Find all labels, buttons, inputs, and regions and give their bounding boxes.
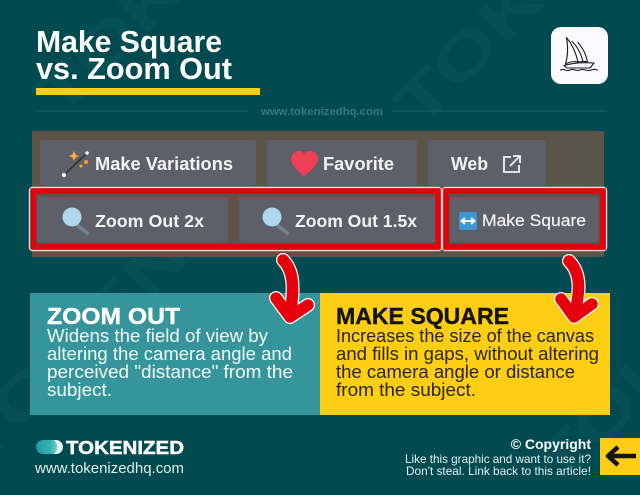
title underline [36, 88, 260, 95]
panel: discord buttons [32, 131, 604, 257]
description: subject. [47, 380, 112, 400]
title [36, 24, 232, 86]
arrow: to zoom out [276, 260, 308, 317]
footer logo: TOKENIZED [66, 437, 184, 458]
copyright note: © Copyright [511, 436, 591, 452]
copyright note: Don't steal. Link back to this article! [406, 464, 591, 478]
button: web: Web [451, 153, 488, 174]
button: make variations: Make Variations [95, 153, 233, 174]
button: favorite [267, 140, 417, 186]
button: make square: Make Square [482, 212, 586, 230]
panel: make square [320, 293, 610, 415]
panel: zoom out [30, 293, 320, 415]
button: zoom out 2x [37, 197, 228, 242]
highlight frame: zoom buttons [30, 188, 442, 250]
heading: ZOOM OUT [47, 303, 180, 329]
button: web [428, 140, 546, 186]
button: favorite: Favorite [323, 153, 394, 174]
title: Make Square [36, 24, 222, 59]
description: Increases the size of the canvas [336, 326, 594, 346]
highlight frame: make square button [442, 188, 606, 250]
website divider: www.tokenizedhq.com [260, 106, 383, 118]
button: zoom out 2x: Zoom Out 2x [95, 211, 204, 231]
button: make variations [40, 140, 256, 186]
description [47, 326, 293, 400]
button: zoom out 1.5x [239, 197, 440, 242]
description: from the subject. [336, 380, 476, 400]
copyright note [405, 436, 591, 478]
description [336, 326, 599, 400]
heading: MAKE SQUARE [336, 303, 509, 329]
description: and fills in gaps, without altering [336, 344, 599, 364]
description: perceived "distance" from the [47, 362, 293, 382]
footer url: www.tokenizedhq.com [34, 460, 184, 477]
description: Widens the field of view by [47, 326, 268, 346]
copyright note: Like this graphic and want to use it? [405, 452, 591, 466]
description: the camera angle or distance [336, 362, 575, 382]
icon: midjourney logo [551, 27, 608, 84]
arrow: to make square [561, 261, 592, 317]
icon: back arrow [600, 438, 640, 475]
button: make square [450, 197, 598, 242]
title: vs. Zoom Out [36, 51, 232, 86]
button: zoom out 1.5x: Zoom Out 1.5x [295, 211, 417, 231]
description: altering the camera angle and [47, 344, 292, 364]
